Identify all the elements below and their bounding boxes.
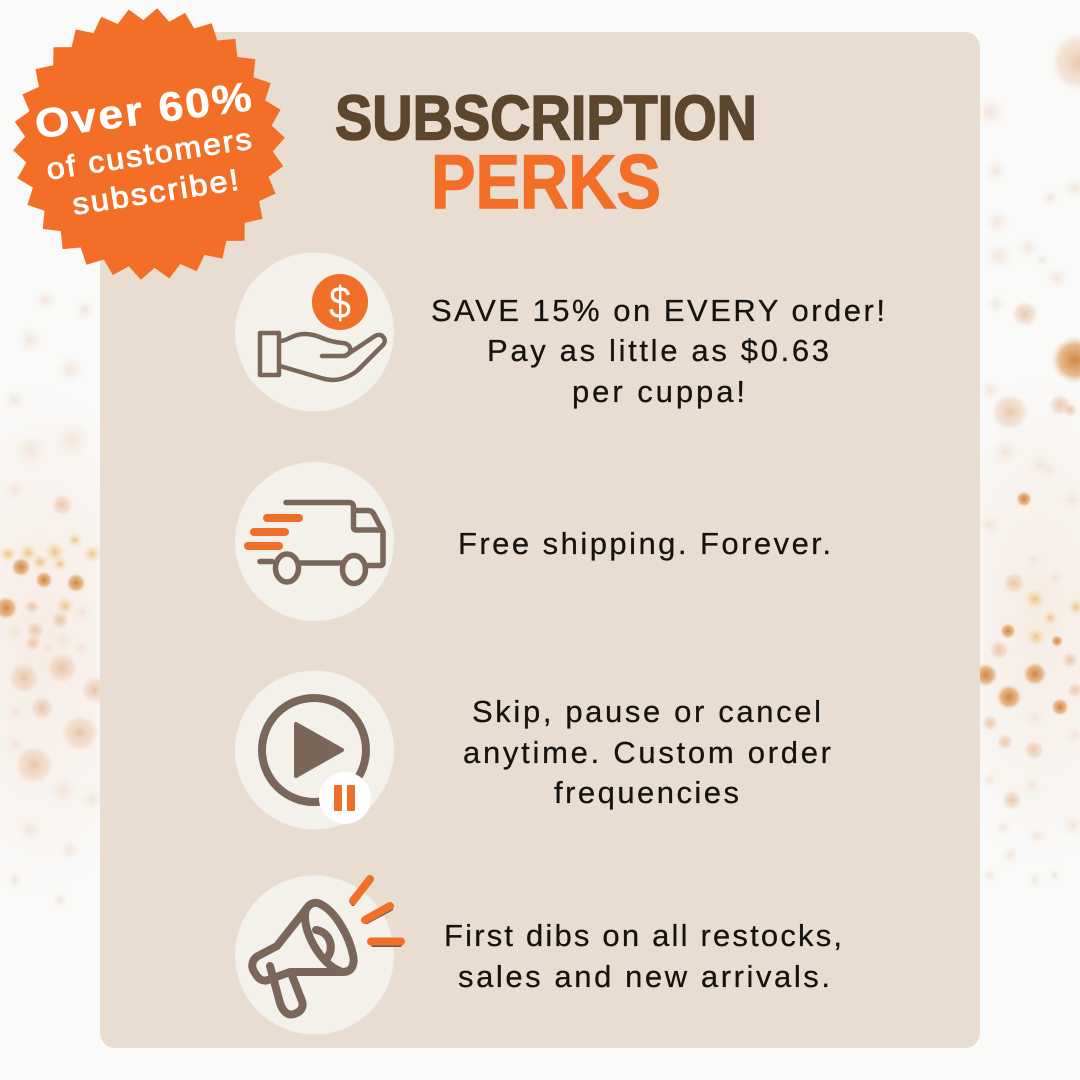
perk 3 text: [463, 694, 831, 810]
icon: megaphone: [235, 876, 401, 1034]
badge: starburst with stat: [13, 8, 285, 280]
starburst shape: [13, 8, 285, 280]
badge text: of customers: [44, 122, 256, 187]
perk 3 text: frequencies: [554, 775, 739, 810]
perk 2 text: Free shipping. Forever.: [458, 526, 831, 561]
perk 4 text: First dibs on all restocks,: [444, 918, 842, 953]
perk 4: first dibs: [235, 876, 842, 1034]
perk 1 text: per cuppa!: [572, 374, 745, 409]
perk 1 text: Pay as little as $0.63: [487, 333, 829, 368]
perk 1 text: SAVE 15% on EVERY order!: [431, 293, 885, 328]
perk 4 text: sales and new arrivals.: [458, 959, 830, 994]
title: SUBSCRIPTION: [335, 84, 757, 154]
perk 4 text: [444, 918, 842, 994]
perk 3 text: Skip, pause or cancel: [472, 694, 821, 729]
icon: play and pause: [235, 670, 394, 830]
title: [335, 84, 757, 225]
panel: perks card: [100, 32, 980, 1048]
icon: hand with dollar coin: [235, 252, 394, 412]
perk 2: shipping: [235, 462, 831, 621]
badge text: subscribe!: [70, 163, 243, 222]
perk 3: flexibility: [235, 670, 831, 830]
perk 1: savings: [235, 252, 885, 412]
badge text: Over 60%: [32, 73, 256, 147]
icon: hand with dollar coin: $: [329, 277, 351, 328]
perk 1 text: [431, 293, 885, 409]
title: PERKS: [431, 140, 661, 225]
perk 3 text: anytime. Custom order: [463, 735, 831, 770]
badge text: [32, 73, 256, 222]
icon: delivery truck: [235, 462, 394, 621]
